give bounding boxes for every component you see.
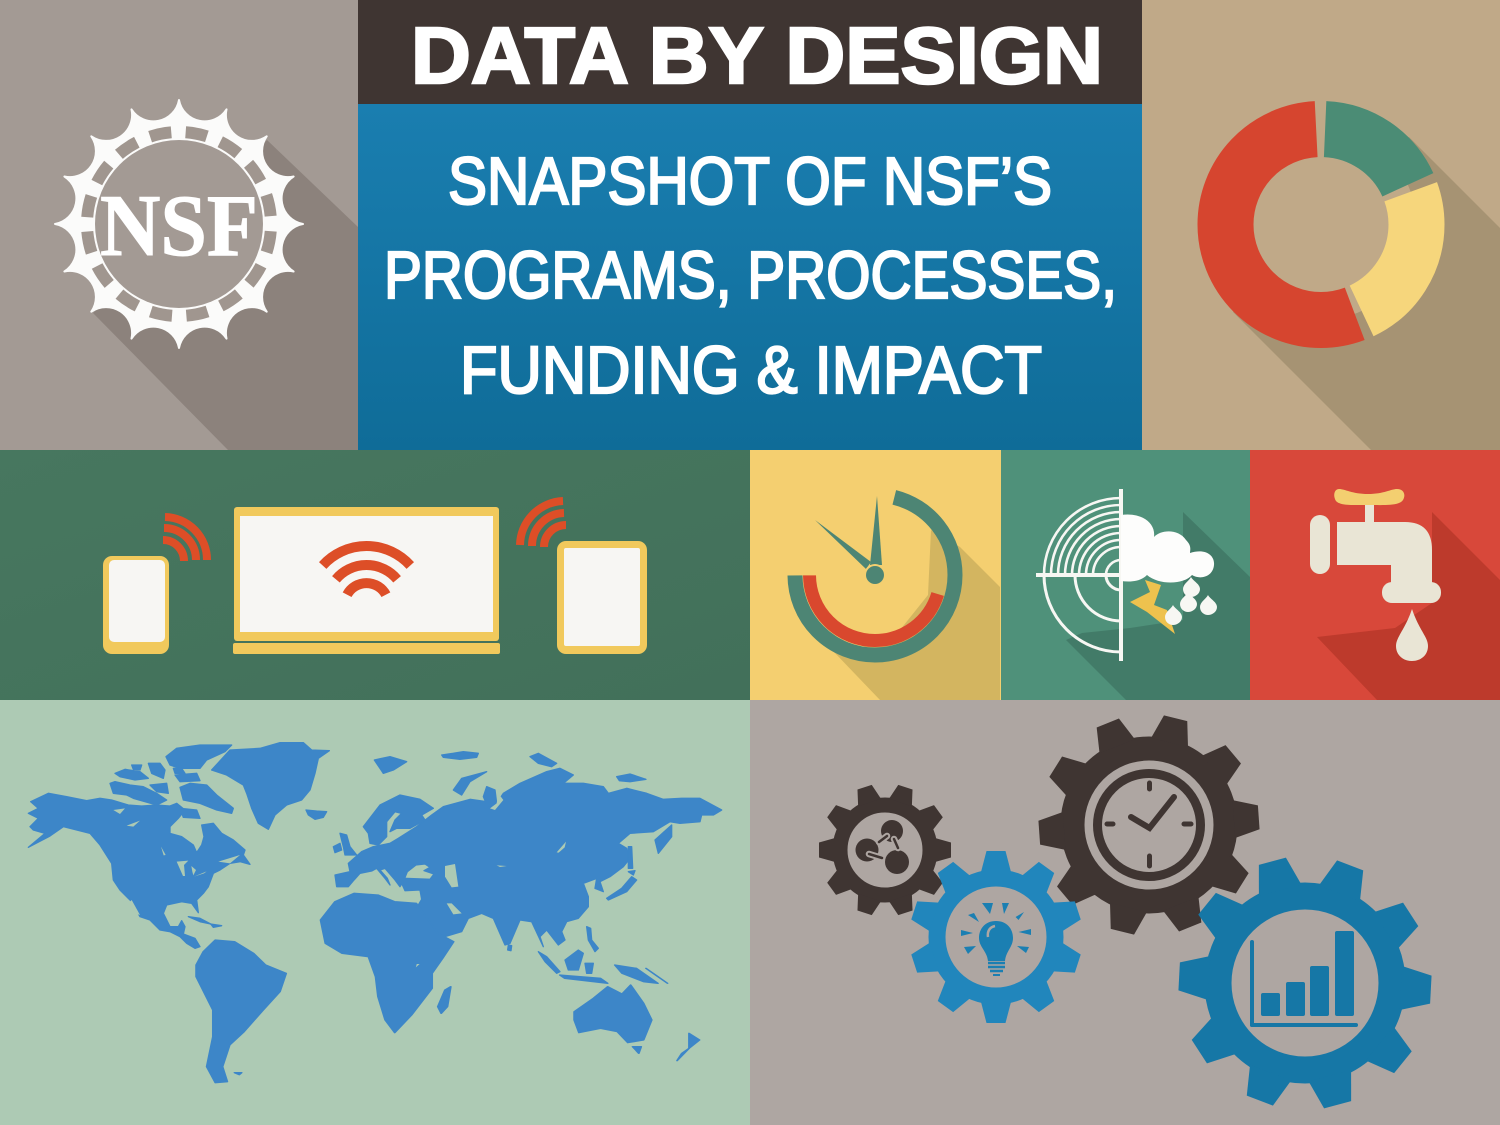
icon: NSF gear seal [55, 100, 303, 348]
map: eurasia [333, 752, 722, 973]
panel: title bar [358, 0, 1142, 104]
gear: clock [1038, 714, 1260, 936]
panel: radar and weather [1001, 450, 1250, 700]
icon: molecule [856, 820, 909, 874]
long shadow of gauge [834, 530, 1000, 700]
icon: laptop wifi signal [323, 546, 410, 595]
icon: NSF gear seal: NSF [100, 178, 258, 275]
icon: clock face [1107, 783, 1191, 866]
panel: water faucet [1250, 450, 1500, 700]
icon: clock hands [815, 496, 886, 586]
panel: NSF logo [0, 0, 358, 450]
icon: right wifi signal [520, 501, 566, 547]
icon: tablet [557, 541, 647, 654]
subtitle line 2: PROGRAMS, PROCESSES, [384, 238, 1117, 313]
long shadow of weather icon [1066, 512, 1250, 700]
panel: gears [750, 700, 1500, 1125]
long shadow of donut [1233, 137, 1500, 450]
icon: phone [103, 556, 169, 654]
icon: laptop [233, 507, 500, 654]
icon: raindrops [1165, 577, 1217, 625]
long shadow of NSF logo [93, 140, 358, 450]
panel: world map [0, 700, 750, 1125]
title: DATA BY DESIGN [411, 11, 1103, 100]
icon: gauge ring [795, 495, 955, 655]
bar chart [1250, 931, 1358, 1027]
gear: light bulb [910, 851, 1082, 1023]
donut chart [1226, 129, 1416, 320]
map: southern continents [196, 893, 700, 1083]
icon: storm cloud [1121, 514, 1214, 583]
panel: donut chart [1142, 0, 1500, 450]
subtitle line 3: FUNDING & IMPACT [460, 333, 1042, 408]
icon: faucet [1310, 489, 1441, 661]
icon: radar [1036, 489, 1121, 661]
panel: clock gauge [750, 450, 1001, 700]
panel: subtitle [358, 104, 1142, 450]
map: north america and greenland [28, 743, 329, 948]
icon: lightning bolt [1130, 580, 1175, 634]
icon: left wifi signal [163, 517, 207, 561]
long shadow of faucet [1317, 512, 1500, 700]
gear: molecule [819, 784, 951, 916]
panel: connected devices [0, 450, 750, 700]
gear: bar chart [1178, 856, 1432, 1110]
subtitle line 1: SNAPSHOT OF NSF’S [448, 144, 1052, 219]
icon: light bulb [961, 903, 1031, 975]
